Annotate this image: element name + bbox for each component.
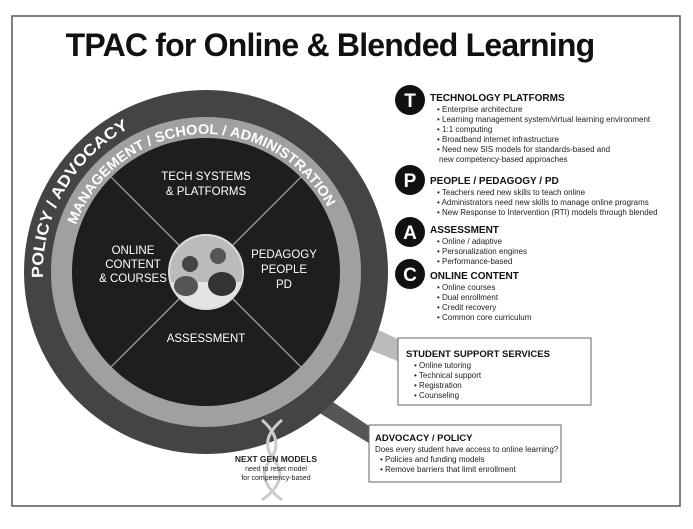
quadrant: assessment: ASSESSMENT bbox=[167, 333, 245, 345]
quadrant: tech: TECH SYSTEMS bbox=[161, 171, 251, 183]
section: online content: • Dual enrollment bbox=[437, 293, 499, 302]
quadrant: pedagogy: PEDAGOGY bbox=[251, 249, 317, 261]
box: advocacy: • Policies and funding models bbox=[380, 455, 485, 464]
section: people: • Administrators need new skills to manage online programs bbox=[437, 198, 649, 207]
circle diagram: PD bbox=[276, 279, 292, 291]
section: technology platforms: new competency-based approaches bbox=[439, 155, 568, 164]
section: people bbox=[395, 165, 658, 217]
next gen models bbox=[235, 454, 317, 482]
section: technology platforms: • Need new SIS models for standards-based and bbox=[437, 145, 610, 154]
section: technology platforms: • Learning management system/virtual learning environment bbox=[437, 115, 651, 124]
section: technology platforms bbox=[395, 85, 651, 164]
icon: dna bbox=[262, 420, 282, 500]
section: technology platforms: • Broadband internet infrastructure bbox=[437, 135, 560, 144]
section: people: P bbox=[404, 171, 417, 192]
section: technology platforms: TECHNOLOGY PLATFORMS bbox=[430, 93, 565, 104]
ring label: management: MANAGEMENT / SCHOOL / ADMINISTRATION bbox=[67, 124, 336, 224]
next gen models: need to reset model bbox=[245, 466, 307, 473]
circle diagram bbox=[24, 90, 388, 454]
section: online content: • Common core curriculum bbox=[437, 313, 532, 322]
box: student support: • Technical support bbox=[414, 371, 482, 380]
box: student support: • Registration bbox=[414, 381, 462, 390]
box: advocacy: Does every student have access to online learning? bbox=[375, 445, 559, 454]
next gen models: NEXT GEN MODELS bbox=[235, 454, 317, 464]
box: advocacy: ADVOCACY / POLICY bbox=[375, 433, 473, 444]
box: student support bbox=[398, 338, 591, 405]
section: people: • New Response to Intervention (RTI) models through blended bbox=[437, 208, 658, 217]
section: assessment: • Online / adaptive bbox=[437, 237, 503, 246]
section: assessment: • Performance-based bbox=[437, 257, 512, 266]
section: assessment bbox=[395, 217, 527, 266]
section: people: • Teachers need new skills to teach online bbox=[437, 188, 586, 197]
next gen models: for competency-based bbox=[241, 475, 311, 482]
box: student support: STUDENT SUPPORT SERVICES bbox=[406, 349, 550, 360]
section: assessment: A bbox=[403, 223, 417, 244]
title: TPAC for Online & Blended Learning bbox=[66, 27, 594, 63]
circle diagram: & COURSES bbox=[99, 273, 167, 285]
box: advocacy: • Remove barriers that limit enrollment bbox=[380, 465, 517, 474]
section: assessment: ASSESSMENT bbox=[430, 225, 499, 236]
section: people: PEOPLE / PEDAGOGY / PD bbox=[430, 176, 559, 187]
box: student support: • Online tutoring bbox=[414, 361, 471, 370]
section: online content: • Online courses bbox=[437, 283, 495, 292]
beam: student support bbox=[320, 305, 400, 362]
section: online content: ONLINE CONTENT bbox=[430, 271, 519, 282]
quadrant: content: ONLINE bbox=[112, 245, 155, 257]
box: advocacy bbox=[369, 425, 561, 482]
section: online content bbox=[395, 259, 532, 322]
circle diagram: CONTENT bbox=[105, 259, 161, 271]
section: online content: C bbox=[403, 265, 417, 286]
section: assessment: • Personalization engines bbox=[437, 247, 527, 256]
beam: advocacy bbox=[290, 380, 372, 445]
section: technology platforms: • Enterprise architecture bbox=[437, 105, 523, 114]
section: technology platforms: • 1:1 computing bbox=[437, 125, 492, 134]
circle diagram: & PLATFORMS bbox=[166, 186, 246, 198]
circle diagram: PEOPLE bbox=[261, 264, 307, 276]
section: technology platforms: T bbox=[404, 91, 416, 112]
center photo bbox=[169, 235, 243, 312]
section: online content: • Credit recovery bbox=[437, 303, 496, 312]
ring label: policy: POLICY / ADVOCACY bbox=[32, 118, 125, 277]
box: student support: • Counseling bbox=[414, 391, 459, 400]
